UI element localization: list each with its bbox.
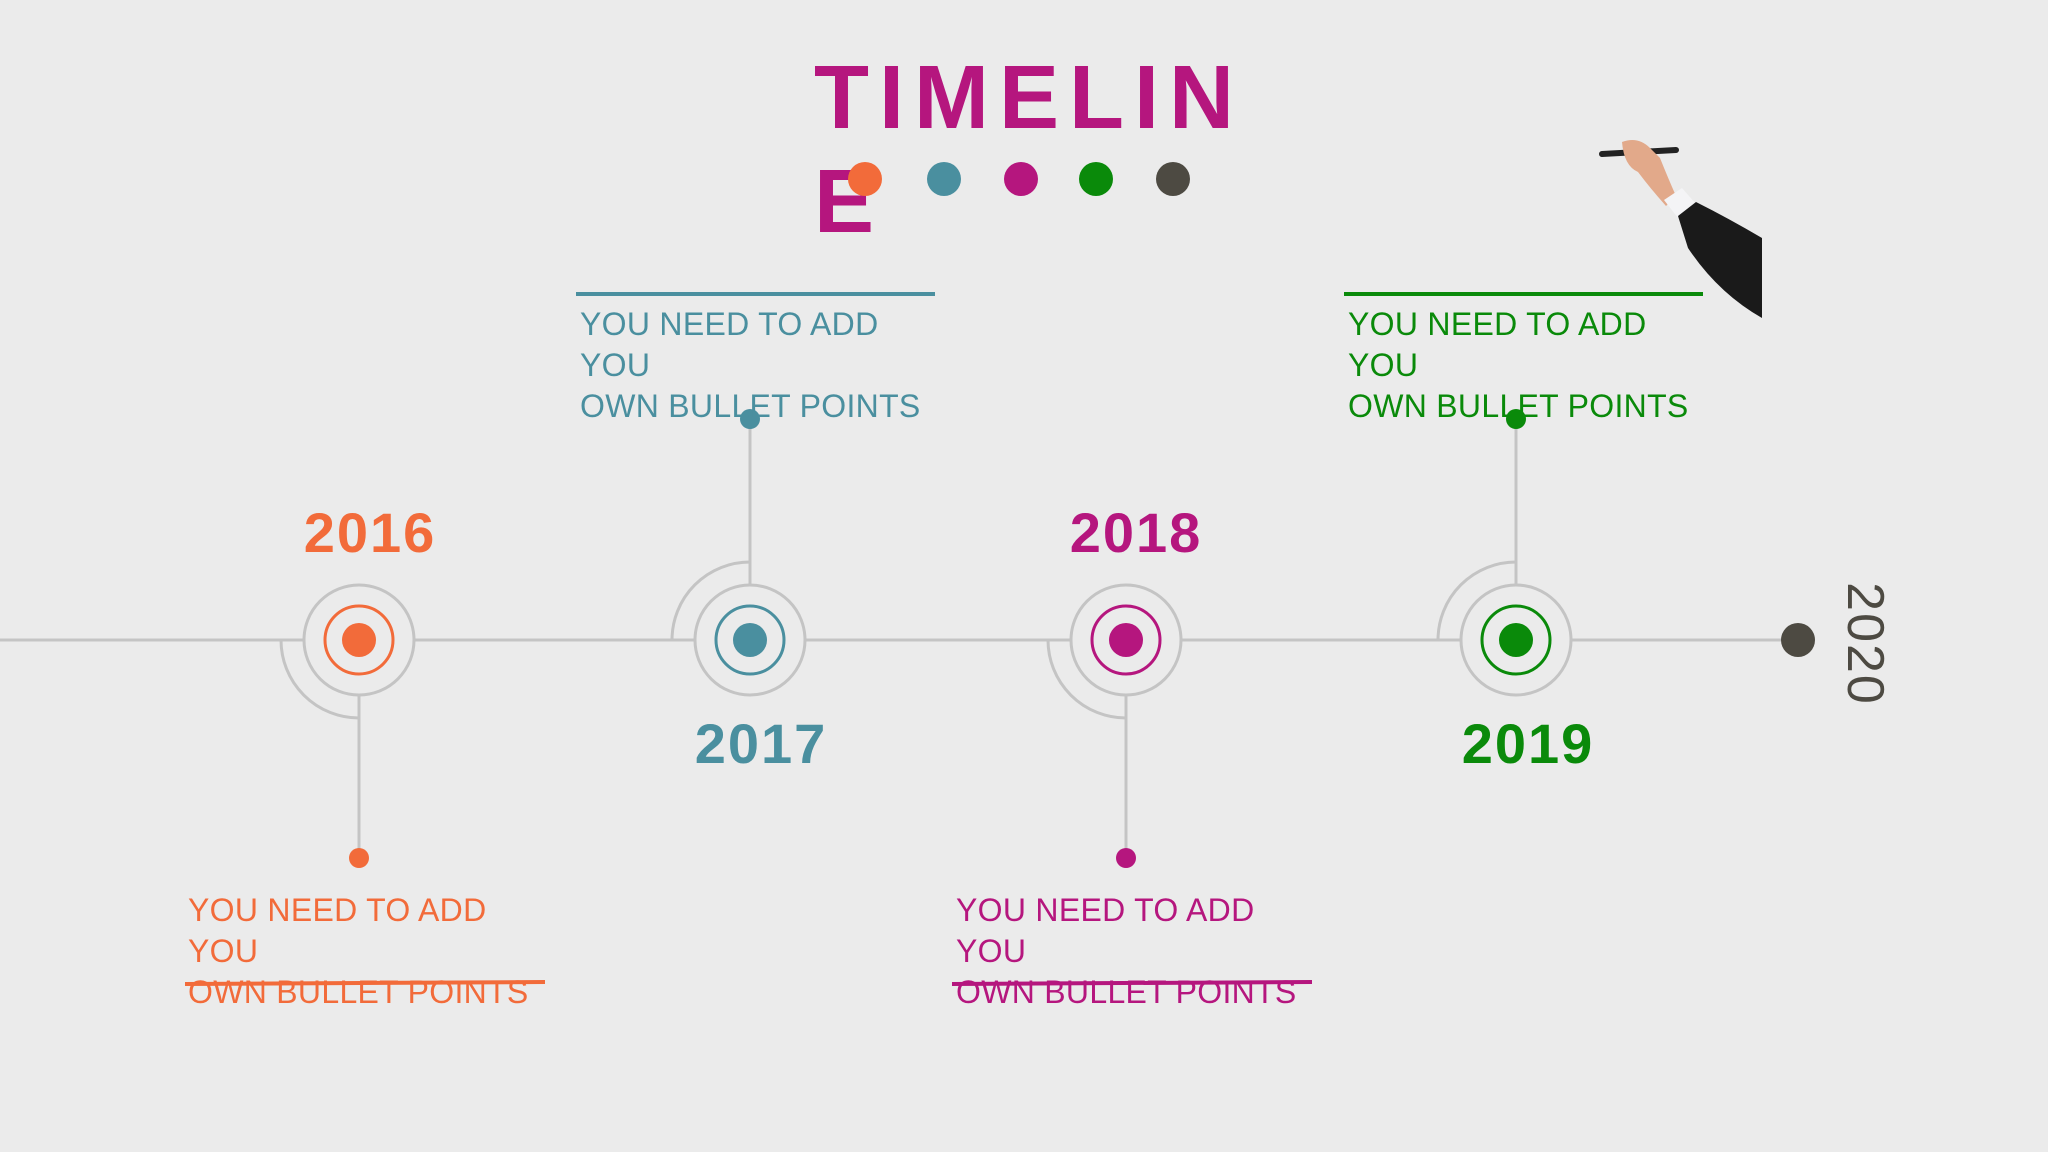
text: 2018: YOU <box>956 933 1026 969</box>
strike lines <box>185 982 545 984</box>
text: 2016: YOU NEED TO ADD <box>188 892 486 928</box>
text: 2019: YOU NEED TO ADD <box>1348 306 1646 342</box>
icon: hand with pen <box>1599 140 1762 318</box>
text: 2017 <box>580 306 921 424</box>
text: 2019 <box>1348 306 1689 424</box>
top rules <box>576 292 935 296</box>
end dot 2020 <box>1781 623 1815 657</box>
year 2020 rotated: 2020 <box>1836 582 1894 706</box>
text: 2017 <box>695 712 827 775</box>
text: 2019 <box>1462 712 1594 775</box>
text: 2019: YOU <box>1348 347 1418 383</box>
text: 2018: OWN BULLET POINTS <box>956 974 1297 1010</box>
node 2017 <box>672 409 805 695</box>
node 2018 <box>1048 585 1181 868</box>
title <box>814 48 1244 252</box>
title: TIMELIN <box>814 48 1244 148</box>
text: 2018: YOU NEED TO ADD <box>956 892 1254 928</box>
text: 2017: YOU NEED TO ADD <box>580 306 878 342</box>
text: 2017: YOU <box>580 347 650 383</box>
node 2016 <box>281 585 414 868</box>
year labels: 2016 <box>304 501 436 564</box>
text: 2016 <box>188 892 529 1010</box>
text: 2017: OWN BULLET POINTS <box>580 388 921 424</box>
title dots <box>848 162 1190 196</box>
title: E <box>814 152 884 252</box>
node 2019 <box>1438 409 1571 695</box>
axis line <box>0 638 1798 642</box>
text: 2019: OWN BULLET POINTS <box>1348 388 1689 424</box>
text: 2016: YOU <box>188 933 258 969</box>
text: 2018 <box>1070 501 1202 564</box>
text: 2016: OWN BULLET POINTS <box>188 974 529 1010</box>
text: 2018 <box>956 892 1297 1010</box>
